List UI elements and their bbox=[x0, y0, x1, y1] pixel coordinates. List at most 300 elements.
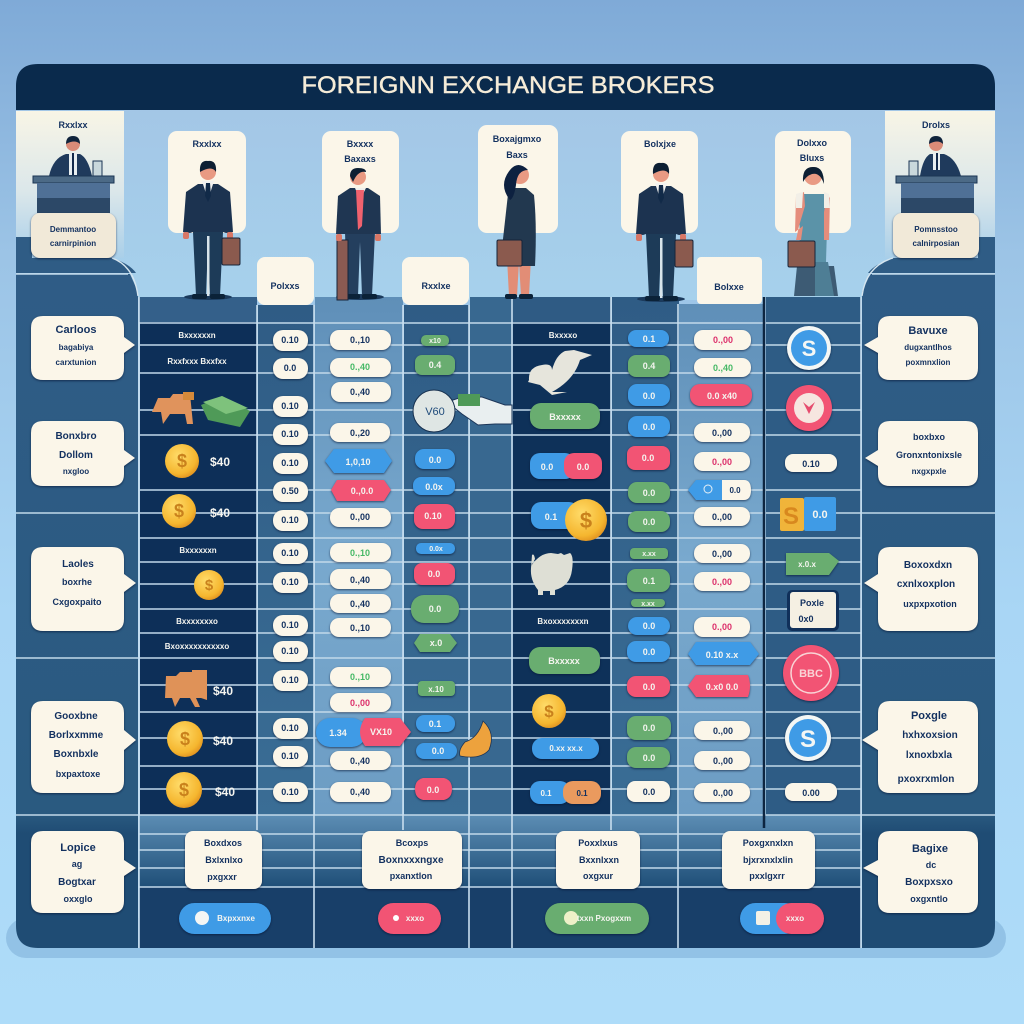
pill bbox=[627, 716, 671, 740]
pill: blue hex: 1,0,10 bbox=[345, 457, 371, 467]
pill bbox=[628, 330, 669, 347]
pill: 0.10 bbox=[281, 620, 299, 630]
pill: blue hex bbox=[325, 449, 392, 473]
title bar bbox=[16, 64, 995, 110]
card: broker 5: Bluxs bbox=[800, 153, 824, 163]
pill bbox=[330, 423, 390, 442]
icon: coin row 13 bbox=[167, 721, 233, 757]
pill: 0.10 bbox=[281, 401, 299, 411]
pill: 0.,00 bbox=[712, 428, 732, 438]
icon: coin row 4 bbox=[165, 444, 230, 478]
pill and coin bbox=[531, 499, 607, 541]
card: column label 2: Rxxlxe bbox=[421, 281, 451, 291]
callout: right 3: uxpxpxotion bbox=[903, 599, 957, 609]
pill bbox=[530, 403, 600, 429]
callout: right 3: Boxoxdxn bbox=[904, 560, 952, 571]
icon: blue dollar badge: S bbox=[802, 336, 816, 361]
pill: 0.4 bbox=[429, 360, 441, 370]
icon: blue dollar badge bbox=[785, 715, 831, 761]
callout: left 5: Lopice bbox=[60, 842, 96, 854]
pill bbox=[627, 569, 670, 592]
pill bbox=[627, 446, 670, 470]
pill bbox=[631, 599, 665, 608]
icon: broker man 1 bbox=[183, 161, 240, 300]
pill: 0.1 bbox=[643, 334, 655, 344]
callout: left 5: oxxglo bbox=[63, 894, 93, 904]
pill: 0.,00 bbox=[350, 512, 370, 522]
pill bbox=[628, 355, 670, 377]
callout: right 4: lxnoxbxla bbox=[906, 750, 952, 761]
icon: speaker at podium bbox=[896, 136, 977, 213]
podium caption card: Pomnsstoo bbox=[914, 225, 958, 234]
icon: orange animal with amount bbox=[165, 670, 233, 707]
callout: right 3 bbox=[864, 547, 978, 631]
pill bbox=[273, 670, 308, 691]
pill bbox=[694, 751, 750, 770]
pill: 0.10 bbox=[281, 751, 299, 761]
pill bbox=[273, 510, 308, 531]
icon: coin row 4: $ bbox=[177, 451, 187, 471]
podium caption card bbox=[31, 213, 116, 258]
pill: 0.10 bbox=[281, 723, 299, 733]
pill: 0.10 bbox=[281, 458, 299, 468]
pill: 0.10 bbox=[281, 577, 299, 587]
pill bbox=[628, 416, 670, 437]
callout: bottom 2: pxanxtlon bbox=[390, 871, 432, 881]
pill: red hex bbox=[331, 480, 391, 501]
pill: 0.00 bbox=[802, 788, 820, 798]
pill bbox=[627, 676, 670, 697]
pill: 0.,10 bbox=[350, 623, 370, 633]
callout: left 5: ag bbox=[72, 859, 82, 869]
card: small framed box: Poxle bbox=[800, 598, 824, 608]
pill: 0.1 bbox=[429, 719, 441, 729]
callout: left 2: Dollom bbox=[59, 450, 93, 461]
callout: bottom 1: Bxlxnlxo bbox=[205, 855, 243, 865]
callout: left 3 bbox=[31, 547, 136, 631]
pill: 0.,00 bbox=[712, 457, 732, 467]
icon: white piggy bbox=[531, 553, 573, 595]
callout: right 2: boxbxo bbox=[913, 432, 945, 442]
pill: 0.10 bbox=[424, 511, 442, 521]
pill: blue and orange: 0.1 bbox=[540, 789, 552, 798]
panel: left podium bbox=[16, 111, 138, 296]
pill: 0.10 bbox=[281, 646, 299, 656]
pill: 0.0 bbox=[643, 647, 655, 657]
callout: bottom 3: Bxxnlxxn bbox=[579, 855, 619, 865]
bottom action pills bbox=[179, 903, 824, 934]
grid lines bbox=[16, 274, 995, 948]
pill: Bxxxxx bbox=[548, 656, 580, 666]
pill bbox=[694, 721, 750, 740]
pill bbox=[273, 641, 308, 662]
pill bbox=[331, 382, 391, 402]
pill: blue action bbox=[179, 903, 271, 934]
base block bbox=[16, 237, 136, 273]
column 5: labels and icons bbox=[528, 331, 607, 804]
callout: left 5: Bogtxar bbox=[58, 877, 96, 888]
pill bbox=[273, 572, 308, 593]
callout: bottom 3 bbox=[556, 831, 640, 889]
pill: 0.0 bbox=[642, 453, 654, 463]
card: broker 1 bbox=[168, 131, 246, 233]
base block bbox=[868, 237, 995, 273]
pill bbox=[330, 751, 391, 770]
pill: green hex: x.0 bbox=[430, 638, 442, 648]
pill: 0.0x bbox=[429, 546, 443, 553]
card: broker 2 bbox=[322, 131, 399, 233]
podium label: Drolxs bbox=[922, 120, 950, 130]
panel: right podium bbox=[862, 111, 995, 296]
pill bbox=[273, 481, 308, 502]
callout: right 4 bbox=[862, 701, 978, 793]
callout: bottom 1 bbox=[185, 831, 262, 889]
card: broker 3 bbox=[478, 125, 558, 233]
pill bbox=[694, 783, 750, 802]
callout: bottom 2: Bcoxps bbox=[396, 838, 428, 848]
icon: coin row 5: $40 bbox=[210, 506, 230, 520]
pill bbox=[694, 330, 751, 350]
podium caption card: calnirposian bbox=[912, 239, 960, 248]
icon: orange animal bbox=[152, 392, 194, 424]
broker label cards bbox=[168, 125, 851, 305]
pill: blue and red: VX10 bbox=[370, 727, 392, 737]
pill: 0.,40 bbox=[350, 787, 370, 797]
callout: left 1: bagabiya bbox=[59, 343, 94, 352]
pill: 0.,10 bbox=[350, 548, 370, 558]
pill bbox=[628, 617, 670, 635]
icon: coin row 15: $40 bbox=[215, 785, 235, 799]
pill: 0.0 bbox=[643, 422, 655, 432]
callout: bottom 4: bjxrxnxlxlin bbox=[743, 855, 793, 865]
pill: 0.0 x40 bbox=[707, 391, 737, 401]
callout: left 5 bbox=[31, 831, 136, 913]
pill bbox=[273, 615, 308, 636]
pill: red hex: 0.,0.0 bbox=[351, 486, 373, 496]
icon: blue dollar badge bbox=[787, 326, 831, 370]
pill bbox=[330, 693, 391, 712]
icon: coin: $ bbox=[544, 702, 554, 721]
pill bbox=[694, 452, 750, 471]
card: column label 2 bbox=[402, 257, 469, 305]
row label: Bxxxxxxn bbox=[178, 331, 216, 340]
pill: blue and red action: xxxo bbox=[786, 914, 804, 923]
row label: Bxoxxxxxxxn bbox=[537, 617, 589, 626]
pill: x10 bbox=[429, 338, 441, 345]
card: broker 3: Baxs bbox=[506, 150, 528, 160]
pill: 0.,00 bbox=[712, 622, 732, 632]
pill and coin: 0.1 bbox=[545, 512, 557, 522]
pill bbox=[330, 569, 391, 589]
pill bbox=[415, 778, 452, 800]
pill: 0.0x bbox=[425, 482, 443, 492]
icon: broker man 4 bbox=[636, 163, 693, 302]
podium backdrop bbox=[885, 111, 995, 258]
callout: bottom 3: Poxxlxus bbox=[578, 838, 618, 848]
pill: 0.0 bbox=[643, 787, 655, 797]
pill bbox=[694, 617, 750, 637]
callout: right 5: Boxpxsxo bbox=[905, 877, 953, 888]
table columns bbox=[139, 297, 257, 322]
pill: blue and red bbox=[530, 453, 602, 479]
bottom row dark cells bbox=[139, 887, 861, 948]
pill bbox=[273, 424, 308, 445]
pill bbox=[415, 449, 455, 469]
card: broker 4: Bolxjxe bbox=[644, 139, 676, 149]
card: broker 5 bbox=[775, 131, 851, 233]
pill: red hex: 0.x0 0.0 bbox=[706, 682, 738, 692]
pill: Bxxxxx bbox=[549, 412, 581, 422]
pill: 0.0 bbox=[643, 723, 655, 733]
pill: blue hex: 0.10 x.x bbox=[706, 650, 738, 660]
pill: 0.xx xx.x bbox=[549, 744, 583, 753]
callout: left 1: Carloos bbox=[56, 324, 96, 336]
card: column label 3: Bolxxe bbox=[714, 282, 744, 292]
icon: white bird bbox=[528, 350, 592, 395]
callout: right 5: Bagixe bbox=[912, 843, 948, 855]
column 8: badges bbox=[780, 326, 839, 801]
pill bbox=[273, 718, 308, 739]
card: broker 3: Boxajgmxo bbox=[493, 134, 542, 144]
callout: bottom 4 bbox=[722, 831, 815, 889]
pill bbox=[411, 595, 459, 623]
pill: 0.,00 bbox=[712, 549, 732, 559]
pill: 0.4 bbox=[643, 361, 655, 371]
card: broker 4 bbox=[621, 131, 698, 233]
icon: orange crescent bbox=[460, 721, 491, 757]
row label: Bxxxxxxxo bbox=[176, 617, 218, 626]
pill bbox=[694, 358, 751, 377]
icon: dollar note: S bbox=[783, 503, 799, 530]
column 6: status pills bbox=[627, 330, 671, 802]
pill: 0.,40 bbox=[350, 362, 370, 372]
card: broker 1: Rxxlxx bbox=[192, 139, 222, 149]
right side panel bbox=[862, 274, 995, 948]
pill bbox=[413, 477, 455, 495]
card: small framed box: 0x0 bbox=[798, 614, 814, 624]
icon: green cash stack bbox=[201, 396, 250, 427]
pill bbox=[627, 641, 670, 662]
icon: coin row 13: $40 bbox=[213, 734, 233, 748]
pill bbox=[785, 783, 837, 801]
pill bbox=[694, 423, 750, 442]
column 4: status pills bbox=[411, 335, 512, 800]
callout: left 2: nxgloo bbox=[63, 467, 89, 476]
pill: blue and red: 1.34 bbox=[329, 728, 347, 738]
callout: right 1 bbox=[864, 316, 978, 380]
pill bbox=[330, 358, 391, 377]
pill bbox=[330, 543, 391, 562]
pill: 0.,00 bbox=[712, 577, 732, 587]
callout: left 4: Gooxbne bbox=[54, 711, 98, 722]
pill: green action: txxn Pxogxxm bbox=[577, 914, 631, 923]
podium caption card: carnirpinion bbox=[50, 239, 96, 248]
icon: orange animal with amount: $40 bbox=[213, 684, 233, 698]
callout: right 5: oxgxntlo bbox=[910, 894, 948, 904]
pill bbox=[414, 563, 455, 585]
podium label: Rxxlxx bbox=[58, 120, 88, 130]
pill: x.10 bbox=[428, 685, 444, 694]
podium caption card bbox=[893, 213, 979, 258]
pill bbox=[330, 618, 391, 637]
icon: broker woman 5 bbox=[788, 167, 838, 296]
column 2: value pills bbox=[273, 330, 308, 802]
pill bbox=[415, 355, 455, 375]
callout: left 3: boxrhe bbox=[62, 577, 92, 587]
pill: blue and cream hex: 0.0 bbox=[729, 486, 741, 495]
pill bbox=[273, 543, 308, 564]
bottom row band bbox=[139, 815, 861, 887]
callout: right 1: Bavuxe bbox=[908, 325, 948, 337]
icon: red stamp: BBC bbox=[799, 668, 823, 680]
pill: green action bbox=[545, 903, 649, 934]
pill: 0.,00 bbox=[713, 335, 733, 345]
pill: 0.50 bbox=[281, 486, 299, 496]
pill: 0.10 bbox=[281, 429, 299, 439]
callout: left 3: Cxgoxpaito bbox=[52, 597, 102, 607]
callout: left 1 bbox=[31, 316, 135, 380]
callout: bottom 4: Poxgxnxlxn bbox=[743, 838, 793, 848]
callout: right 5: dc bbox=[926, 860, 936, 870]
icon: coin row 13: $ bbox=[180, 729, 190, 749]
icon: coin row 4: $40 bbox=[210, 455, 230, 469]
pill: blue and cream hex bbox=[688, 480, 751, 500]
callout: right 2 bbox=[865, 421, 978, 486]
pill: 0.,00 bbox=[713, 726, 733, 736]
pill: red action bbox=[378, 903, 441, 934]
pill bbox=[694, 544, 750, 563]
pill: 0.10 bbox=[281, 515, 299, 525]
pill: 0.0 bbox=[427, 785, 439, 795]
pill: 0.0 bbox=[429, 455, 441, 465]
title: FOREIGNN EXCHANGE BROKERS bbox=[302, 72, 714, 99]
icon: coin row 5: $ bbox=[174, 501, 184, 521]
pill: red action: xxxo bbox=[406, 914, 424, 923]
pill: blue and red action bbox=[740, 903, 824, 934]
callout: bottom 1: pxgxxr bbox=[207, 872, 237, 882]
pill: 0.0 bbox=[429, 604, 441, 614]
pill: 0.0 bbox=[643, 682, 655, 692]
pill: 0.10 bbox=[281, 787, 299, 797]
pill bbox=[330, 594, 391, 613]
pill: 0.0 bbox=[643, 621, 655, 631]
pill bbox=[418, 681, 455, 696]
icon: red stamp bbox=[783, 645, 839, 701]
pill bbox=[273, 453, 308, 474]
callout: left 2: Bonxbro bbox=[55, 431, 97, 442]
pill bbox=[628, 482, 670, 503]
pill bbox=[416, 743, 457, 759]
card: broker 5: Dolxxo bbox=[797, 138, 828, 148]
pill bbox=[785, 454, 837, 472]
left callouts bbox=[31, 316, 136, 913]
pill bbox=[416, 543, 455, 554]
icon: broker woman 3 bbox=[497, 165, 536, 299]
icon: coin row 15: $ bbox=[179, 780, 189, 800]
callout: right 2: Gronxntonixsle bbox=[896, 450, 962, 460]
right callouts bbox=[862, 316, 978, 913]
icon: coin: $ bbox=[205, 577, 214, 594]
pill: 0.,00 bbox=[713, 788, 733, 798]
callout: bottom 1: Boxdxos bbox=[204, 838, 242, 848]
pill: blue and orange bbox=[530, 781, 601, 804]
callout: bottom 4: pxxlgxrr bbox=[749, 871, 785, 881]
brokers bbox=[183, 161, 838, 302]
pill: 0.10 bbox=[281, 675, 299, 685]
pill bbox=[532, 738, 599, 759]
callout: right 4: Poxgle bbox=[911, 710, 947, 722]
column 3: rate pills bbox=[316, 330, 411, 802]
pill: 0.,40 bbox=[350, 387, 370, 397]
row label: Rxxfxxx Bxxfxx bbox=[167, 357, 227, 366]
card: column label 1: Polxxs bbox=[270, 281, 300, 291]
bottom callouts bbox=[185, 831, 815, 889]
pill: blue hex bbox=[688, 642, 759, 665]
pill bbox=[627, 747, 670, 768]
sky area behind brokers bbox=[16, 100, 995, 300]
callout: left 3: Laoles bbox=[62, 559, 94, 570]
pill: 0.,00 bbox=[350, 698, 370, 708]
podium backdrop bbox=[16, 111, 124, 258]
pill bbox=[694, 572, 750, 591]
callout: left 2 bbox=[31, 421, 135, 486]
pill: 0.,20 bbox=[350, 428, 370, 438]
callout: right 4: hxhxoxsion bbox=[902, 730, 958, 741]
pill: 0.0 bbox=[643, 753, 655, 763]
pill bbox=[330, 667, 391, 687]
callout: right 1: dugxantlhos bbox=[904, 343, 952, 352]
pill: 0.,10 bbox=[350, 672, 370, 682]
card: column label 1 bbox=[257, 257, 314, 305]
callout: bottom 2: Boxnxxxngxe bbox=[378, 855, 444, 866]
callout: bottom 2 bbox=[362, 831, 462, 889]
pill bbox=[630, 548, 668, 559]
pill: green hex bbox=[414, 634, 457, 652]
pill: 0.,40 bbox=[713, 363, 733, 373]
pill bbox=[273, 782, 308, 802]
column 1: labels and icons bbox=[152, 331, 250, 808]
pill: 0.0 bbox=[284, 363, 296, 373]
pill: blue and red: 0.0 bbox=[577, 462, 589, 472]
pill: 0.10 bbox=[802, 459, 820, 469]
icon: green arrow tag: x.0.x bbox=[798, 560, 816, 569]
icon: broker man 2 bbox=[336, 168, 384, 300]
icon: dollar note bbox=[780, 497, 836, 531]
pill: blue and orange: 0.1 bbox=[576, 789, 588, 798]
pill: 0.0 bbox=[643, 488, 655, 498]
pill bbox=[628, 511, 670, 532]
panel drop shadow bbox=[6, 918, 1006, 958]
pill: 0.,00 bbox=[712, 512, 732, 522]
pill: 0.,40 bbox=[350, 599, 370, 609]
pill: red hex bbox=[688, 675, 750, 697]
callout: right 3: cxnlxoxplon bbox=[897, 579, 955, 590]
pill bbox=[414, 504, 455, 529]
icon: coin row 15 bbox=[166, 772, 235, 808]
callout: right 5 bbox=[863, 831, 978, 913]
row label: Bxoxxxxxxxxxxo bbox=[165, 642, 229, 651]
callout: left 4: Borlxxmme bbox=[49, 730, 104, 741]
icon: coin row 5 bbox=[162, 494, 230, 528]
pill bbox=[330, 330, 391, 350]
pill: 0.10 bbox=[281, 548, 299, 558]
icon: dollar note: 0.0 bbox=[812, 509, 828, 521]
pill bbox=[690, 384, 752, 406]
pill bbox=[330, 782, 391, 802]
callout: left 4 bbox=[31, 701, 136, 793]
card: small framed box bbox=[787, 590, 839, 631]
pill: 0.10 bbox=[281, 335, 299, 345]
